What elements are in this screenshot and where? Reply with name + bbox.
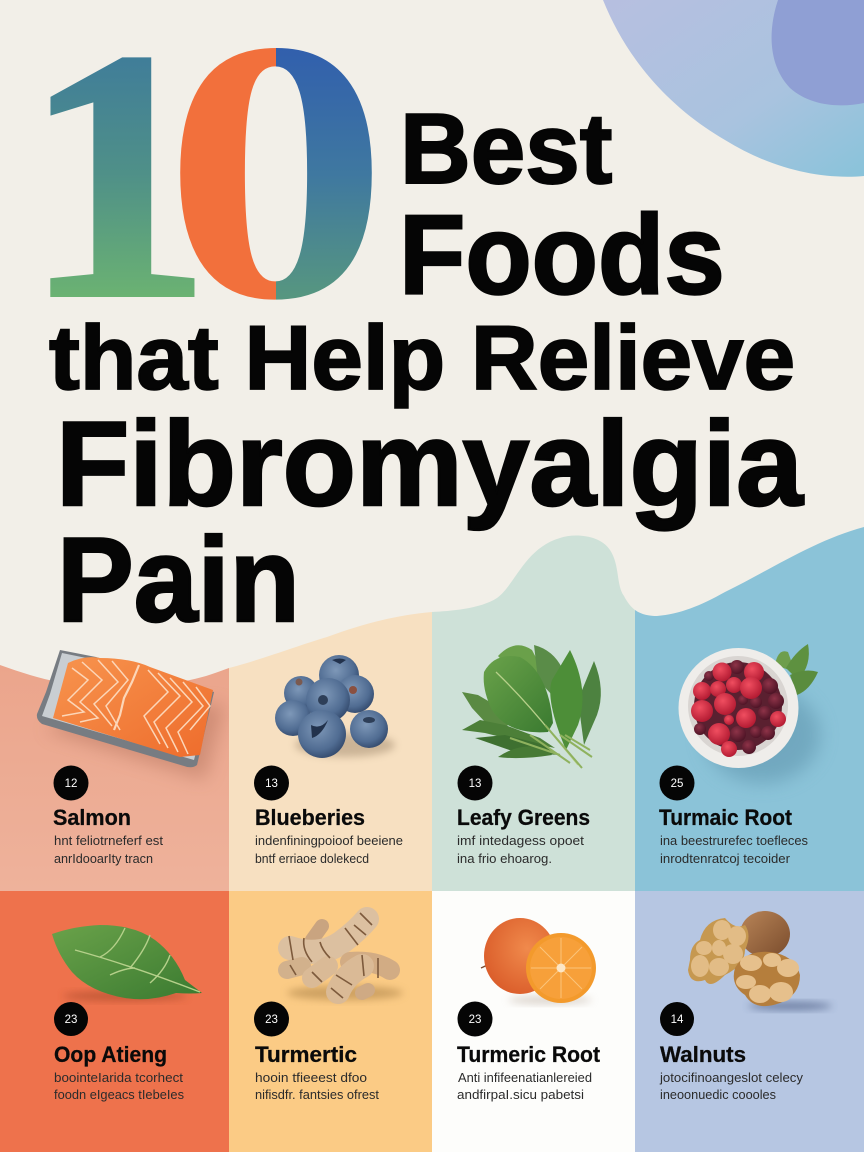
heading: Pain: Pain (57, 519, 300, 651)
description: Turmaic Root: ina beestrurefec toefleces (660, 834, 808, 848)
badge: 25: 25 (671, 778, 683, 790)
item title: Leafy Greens: Leafy Greens (457, 805, 590, 830)
icon: leafy greens (462, 645, 601, 768)
description: Oop Atieng: boointeIarida tcorhect (54, 1071, 184, 1085)
description: Turmertic (255, 1071, 380, 1102)
badge: 23: 23 (469, 1014, 481, 1026)
badge: 25 (660, 766, 694, 800)
badge: 12 (54, 766, 88, 800)
panel: Salmon (0, 650, 229, 891)
description: Salmon: hnt feliotrneferf est (54, 834, 164, 848)
item title: Oop Atieng: Oop Atieng (54, 1042, 167, 1067)
icon: green leaf (52, 925, 202, 1001)
badge: 12: 12 (65, 778, 77, 790)
description: Turmaic Root (660, 834, 808, 866)
badge: 14: 14 (671, 1014, 684, 1026)
heading: Fibromyalgia: Fibromyalgia (56, 403, 803, 535)
title (49, 98, 805, 651)
description: Leafy Greens: ina frio ehoarog. (457, 852, 552, 866)
panel: Turmeric Root (432, 891, 635, 1152)
panel: Leafy Greens (432, 536, 635, 891)
item title: Blueberies: Blueberies (255, 805, 365, 830)
panel: Turmaic Root (635, 527, 864, 891)
badge: 23: 23 (65, 1014, 77, 1026)
description: Blueberies: bntf erriaoe dolekecd (255, 852, 369, 866)
badge: 13: 13 (265, 778, 278, 790)
badge: 13: 13 (469, 778, 481, 790)
badge: 13 (458, 766, 492, 800)
heading: Foods: Foods (399, 198, 725, 322)
heading: that Help Relieve: that Help Relieve (49, 311, 795, 412)
icon: orange (481, 918, 596, 1004)
item title: Walnuts: Walnuts (660, 1042, 746, 1067)
panel: Turmertic (229, 891, 432, 1152)
decorative blob: top right (603, 0, 864, 177)
description: Salmon: anrIdooarIty tracn (54, 852, 153, 866)
panel: Blueberries (229, 612, 432, 891)
description: Turmeric Root: andfirpaI.sicu pabetsi (457, 1088, 584, 1102)
description: Turmertic: hooin tfieeest dfoo (255, 1071, 367, 1085)
description: Walnuts (659, 1071, 804, 1102)
description: Turmeric Root: Anti infifeenatianlereied (458, 1071, 592, 1085)
description: Turmeric Root (457, 1071, 592, 1102)
badge: 23 (458, 1002, 492, 1036)
description: Oop Atieng: foodn eIgeacs tIebeIes (54, 1088, 184, 1102)
description: Salmon (54, 834, 164, 866)
panel: Oop Atieng (0, 891, 229, 1152)
badge: 23: 23 (265, 1014, 278, 1026)
description: Oop Atieng (54, 1071, 184, 1102)
description: Walnuts: jotocifinoangeslot celecy (659, 1071, 804, 1085)
item title: Turmaic Root: Turmaic Root (659, 805, 793, 830)
item title: Turmeric Root: Turmeric Root (457, 1042, 601, 1067)
big numeral 10 (22, 0, 389, 377)
description: Blueberies (255, 834, 403, 866)
icon: blueberries (275, 655, 395, 758)
badge: 23 (254, 1002, 289, 1036)
icon: turmeric root (287, 913, 403, 1000)
badge: 13 (254, 766, 289, 800)
icon: walnuts (688, 911, 832, 1010)
description: Leafy Greens (457, 834, 585, 866)
badge: 23 (54, 1002, 88, 1036)
badge: 14 (660, 1002, 694, 1036)
description: Turmaic Root: inrodtenratcoj tecoider (660, 852, 790, 866)
item title: Turmertic: Turmertic (255, 1042, 357, 1067)
description: Blueberies: indenfiningpoioof beeiene (255, 834, 403, 848)
icon: salmon fillet (37, 650, 225, 780)
heading: Best: Best (400, 98, 612, 208)
description: Turmertic: nifisdfr. fantsies ofrest (255, 1088, 380, 1102)
icon: bowl of berries (678, 644, 820, 783)
description: Walnuts: ineoonuedic coooles (660, 1088, 776, 1102)
item title: Salmon: Salmon (53, 805, 131, 830)
panel: Walnuts (635, 891, 864, 1152)
description: Leafy Greens: imf intedagess opoet (457, 834, 585, 848)
